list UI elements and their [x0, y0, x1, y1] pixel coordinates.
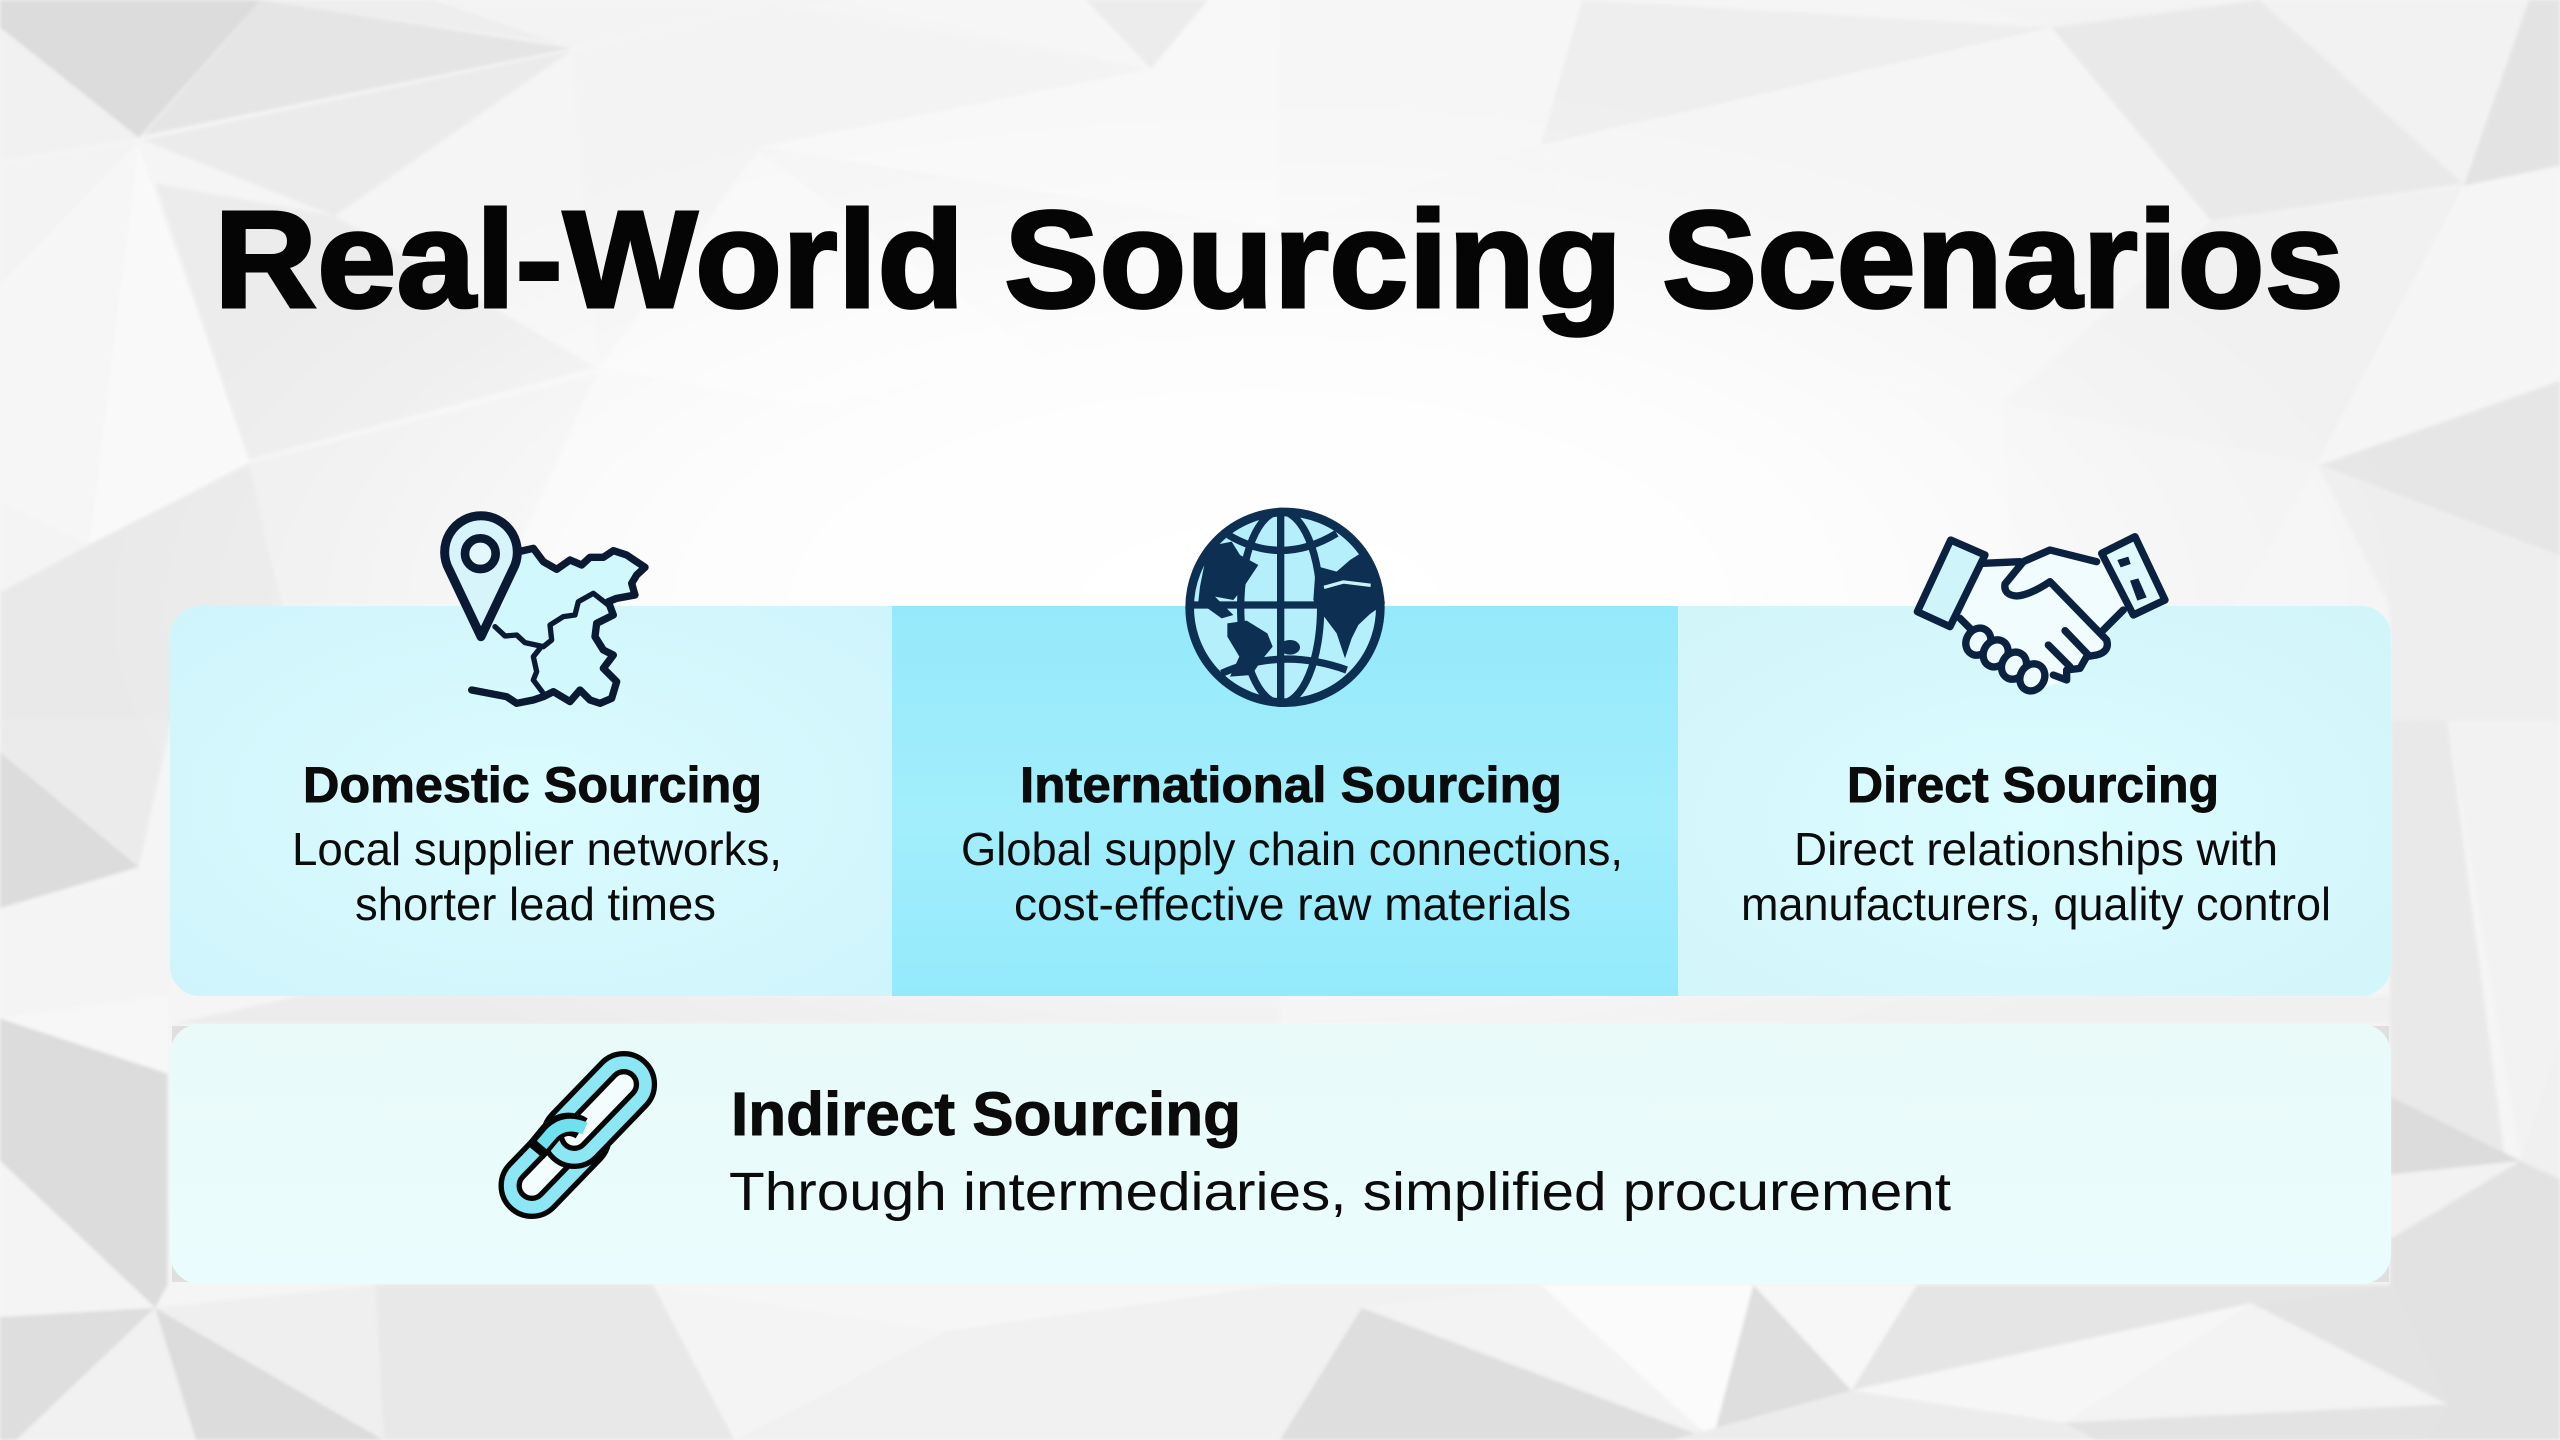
text: direct description: Direct relationships with: [1794, 823, 2278, 875]
text: domestic description: Local supplier networks,: [292, 823, 782, 875]
title: Real-World Sourcing Scenarios: [214, 183, 2344, 337]
panel: international sourcing: [892, 606, 1678, 996]
icon: globe: [1189, 511, 1385, 703]
heading: international sourcing: International Sourcing: [1020, 757, 1562, 813]
panel: direct sourcing: [1678, 606, 2391, 996]
icon: map with location pin: [445, 516, 645, 703]
text: international description: Global supply chain connections,: [961, 823, 1623, 875]
heading: direct sourcing: Direct Sourcing: [1847, 757, 2219, 813]
panel: domestic sourcing: [170, 606, 893, 996]
icon: chain link: [501, 1054, 654, 1216]
text: international description: [961, 823, 1623, 930]
heading: indirect sourcing: Indirect Sourcing: [731, 1080, 1241, 1148]
text: direct description: [1741, 823, 2331, 930]
icon: handshake: [1917, 537, 2165, 695]
text: domestic description: shorter lead times: [355, 878, 716, 930]
text: indirect description: Through intermediaries, simplified procurement: [729, 1162, 1951, 1222]
heading: domestic sourcing: Domestic Sourcing: [303, 757, 762, 813]
text: international description: cost-effective raw materials: [1014, 878, 1571, 930]
panel: indirect sourcing: [170, 1024, 2391, 1284]
text: direct description: manufacturers, quality control: [1741, 878, 2331, 930]
text: domestic description: [292, 823, 782, 930]
